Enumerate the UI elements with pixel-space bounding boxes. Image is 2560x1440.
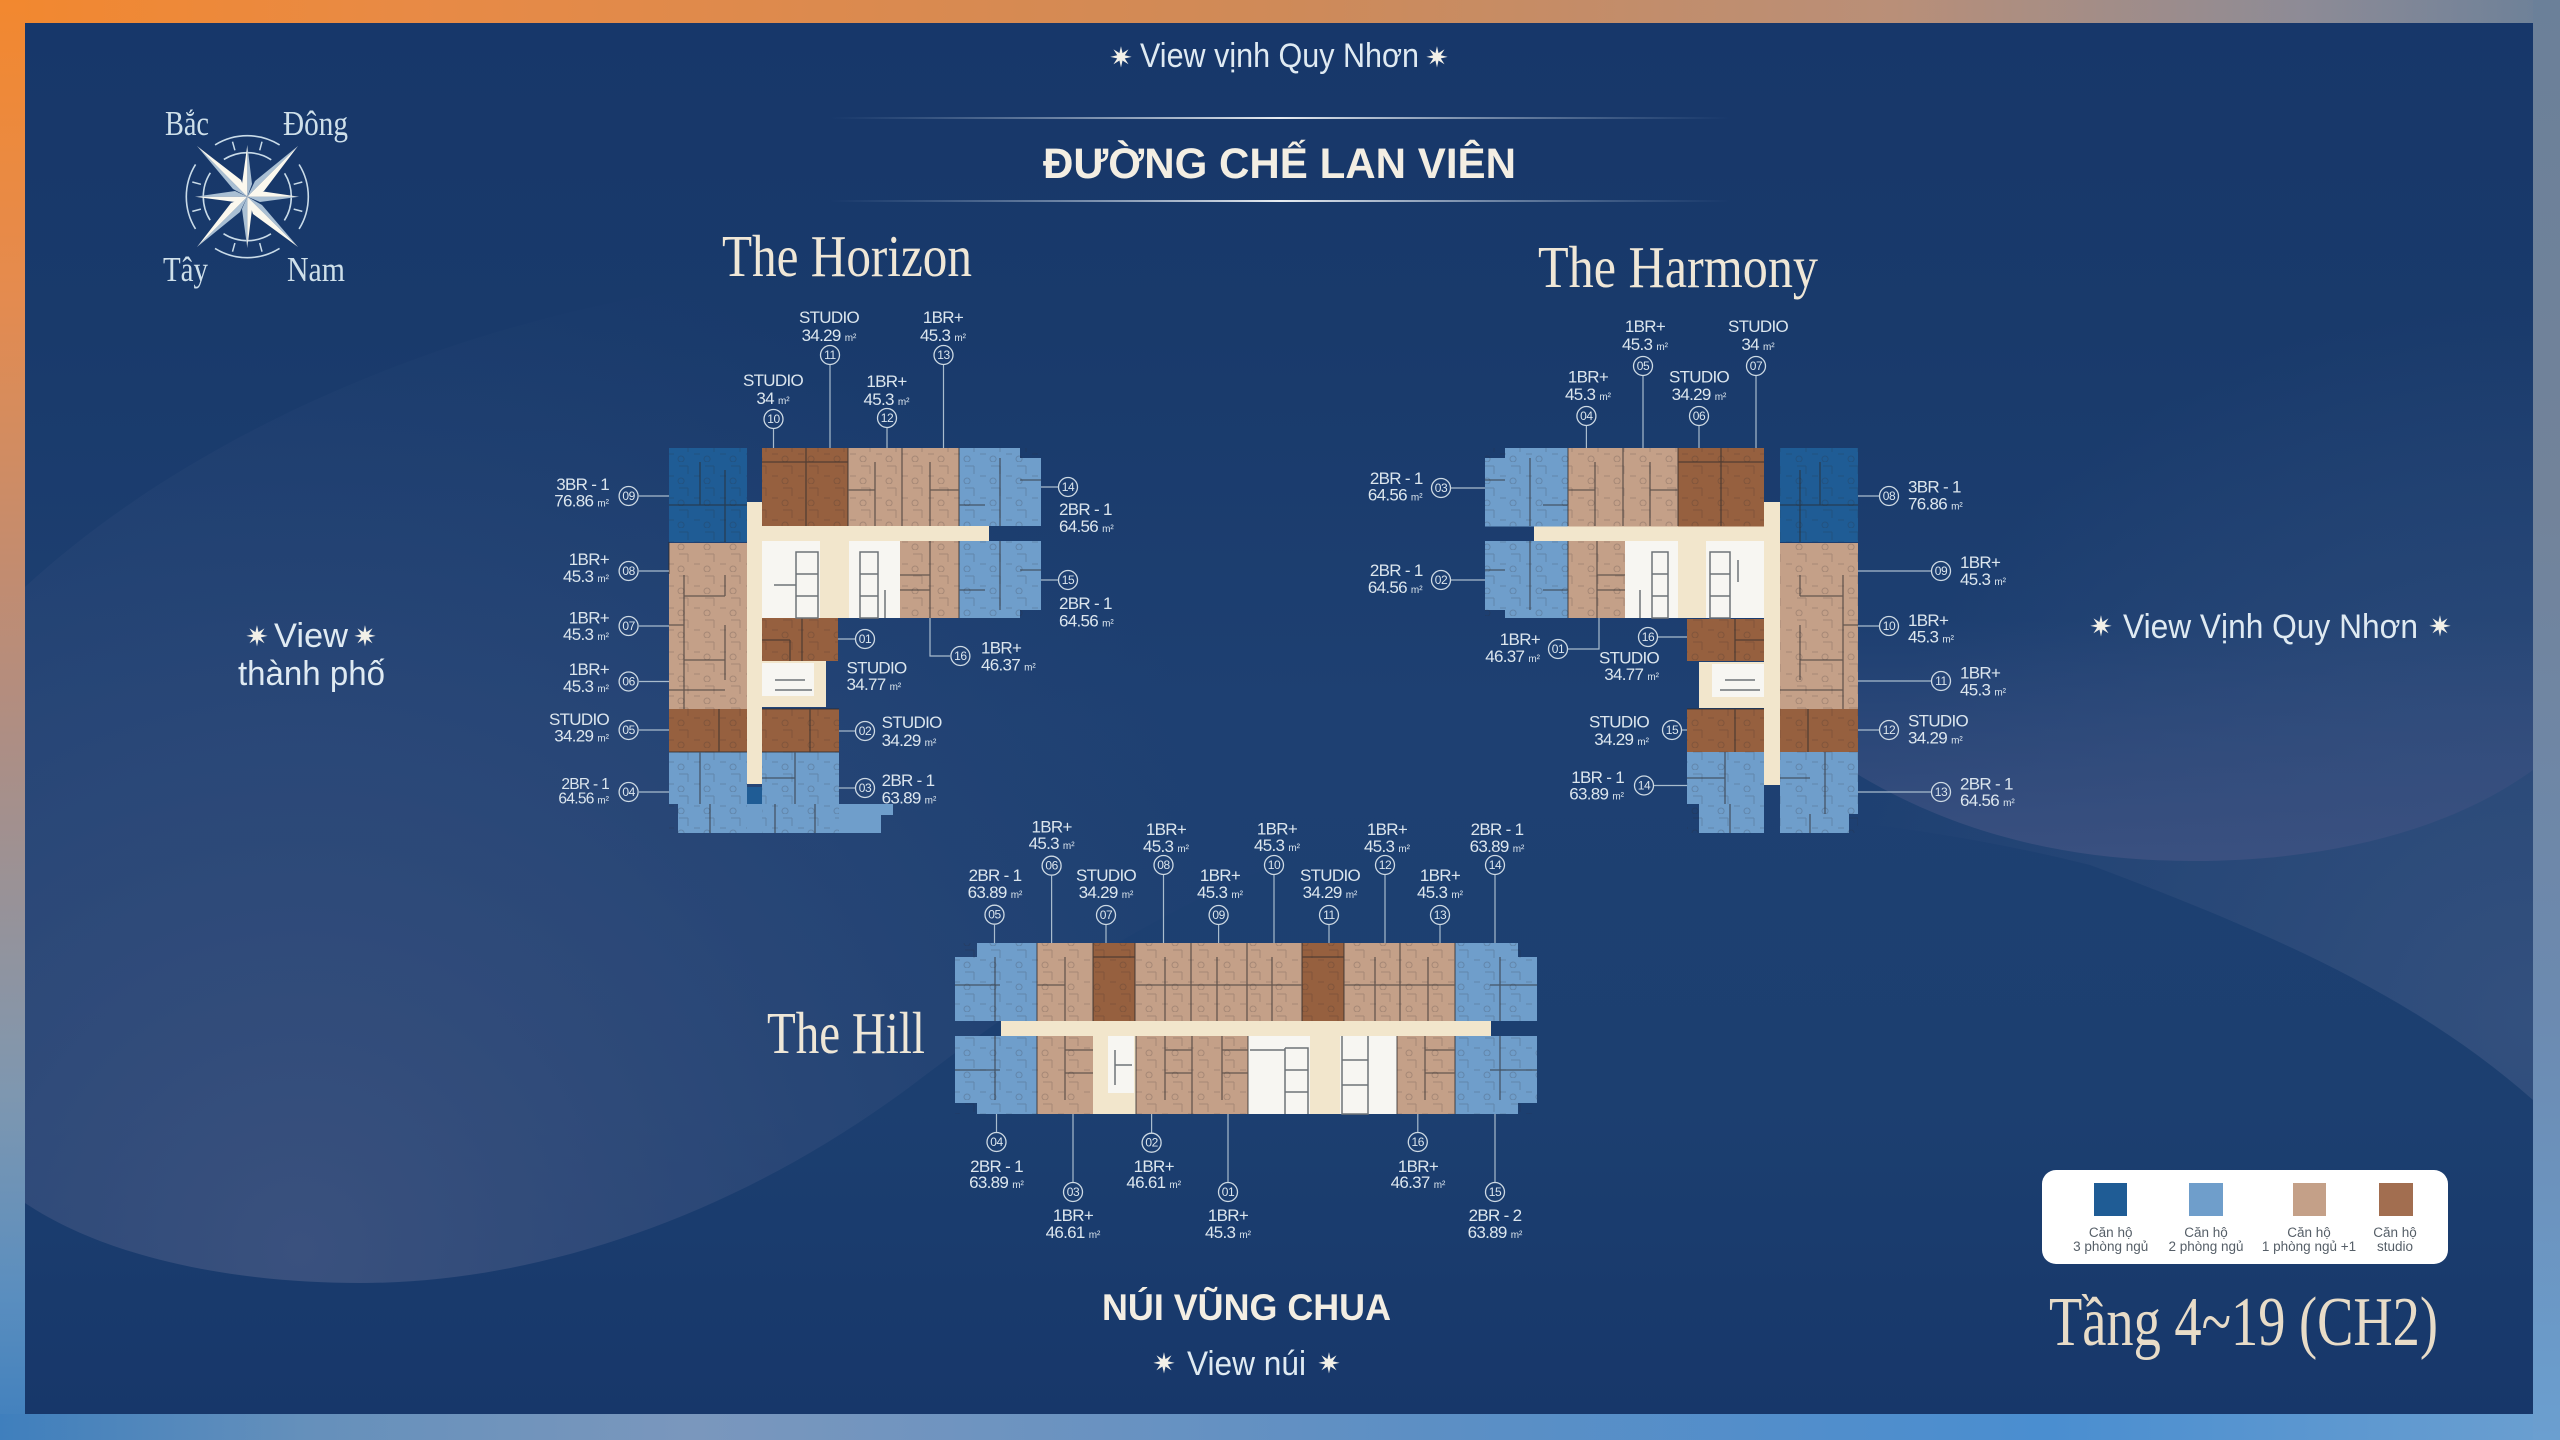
label 09 (554, 475, 669, 510)
label 13: 45.3 m² (920, 326, 967, 345)
label 07 (563, 609, 669, 644)
label 02: 34.29 m² (882, 731, 937, 750)
view city (238, 617, 385, 693)
label 10: 10 (767, 412, 780, 426)
label 03: 03 (1067, 1185, 1080, 1199)
label 12: 12 (881, 411, 894, 425)
label 02: 1BR+ (1134, 1157, 1175, 1176)
label 01 (838, 630, 907, 694)
label 04 (1565, 368, 1612, 448)
label 04: 63.89 m² (969, 1173, 1025, 1192)
label 08: 08 (622, 564, 636, 578)
label 11: 11 (824, 348, 837, 362)
label 15 (1589, 713, 1687, 749)
label 06 (1669, 368, 1729, 448)
label 10: 1BR+ (1908, 611, 1949, 630)
label 12: 12 (1379, 858, 1392, 872)
label 09: 1BR+ (1960, 553, 2001, 572)
legend: Căn hộ (2184, 1225, 2228, 1240)
label 15: 63.89 m² (1468, 1223, 1523, 1242)
label 05: 05 (622, 723, 636, 737)
label 09: 3BR - 1 (556, 475, 609, 494)
label 08 (563, 550, 669, 586)
label 03 (1046, 1114, 1101, 1242)
label 07: 07 (1750, 359, 1763, 373)
label 14: 14 (1062, 480, 1075, 494)
label 11: STUDIO (1300, 866, 1360, 885)
label 04 (969, 1114, 1025, 1192)
label 13 (920, 308, 967, 448)
label 13: 1BR+ (1420, 866, 1461, 885)
label 05: 63.89 m² (968, 883, 1023, 902)
view mountain: ✷ (1317, 1347, 1341, 1380)
label 05: 2BR - 1 (969, 866, 1022, 885)
view mountain (1152, 1345, 1341, 1383)
label 05: 05 (1637, 359, 1650, 373)
label 03: 2BR - 1 (1370, 469, 1423, 488)
legend: 3 phòng ngủ (2073, 1239, 2148, 1254)
label 04: 04 (622, 785, 636, 799)
view mountain: ✷ (1152, 1347, 1176, 1380)
label 12: 45.3 m² (1364, 837, 1411, 856)
floor range title: Tầng 4~19 (CH2) (2049, 1284, 2438, 1361)
label 04 (558, 776, 669, 808)
label 02: 02 (1145, 1136, 1159, 1150)
label 03 (1368, 469, 1485, 505)
view mountain: View núi (1187, 1345, 1306, 1383)
label 03: 1BR+ (1053, 1206, 1094, 1225)
compass rose: Nam (287, 250, 345, 289)
label 14: 64.56 m² (1059, 517, 1114, 536)
label 16: 16 (954, 649, 967, 663)
label 10: 10 (1883, 619, 1896, 633)
compass rose: Tây (163, 250, 208, 289)
label 07 (1728, 317, 1788, 448)
label 03: 46.61 m² (1046, 1223, 1101, 1242)
label 14: 2BR - 1 (1471, 820, 1524, 839)
label 02 (1126, 1114, 1182, 1192)
label 05 (549, 710, 669, 746)
tower heading: The Horizon: The Horizon (722, 223, 972, 289)
label 08: 1BR+ (1146, 820, 1187, 839)
label 06 (563, 660, 669, 696)
legend: Căn hộ (2089, 1225, 2132, 1240)
label 10: 45.3 m² (1254, 836, 1301, 855)
label 07: 1BR+ (569, 609, 610, 628)
label 09: 09 (1935, 564, 1948, 578)
label 04: 04 (1580, 409, 1593, 423)
label 08 (1143, 820, 1190, 943)
label 14 (1569, 768, 1687, 804)
label 07: STUDIO (1728, 317, 1788, 336)
label 16: 1BR+ (1398, 1157, 1439, 1176)
label 16 (1599, 628, 1687, 684)
label 08: 45.3 m² (1143, 837, 1190, 856)
label 13: 2BR - 1 (1960, 774, 2013, 794)
label 14: 14 (1489, 858, 1502, 872)
label 01: 34.77 m² (846, 675, 902, 694)
label 10: 45.3 m² (1908, 628, 1955, 646)
label 03: 63.89 m² (882, 789, 937, 808)
label 05: 05 (988, 908, 1001, 922)
heading: mountain name: NÚI VŨNG CHUA (1102, 1286, 1391, 1328)
label 14 (1041, 478, 1114, 536)
label 09 (1858, 553, 2007, 589)
label 14 (1470, 820, 1525, 943)
label 01 (1205, 1114, 1252, 1242)
label 10: 34 m² (756, 389, 790, 408)
view city: thành phố (238, 655, 385, 693)
label 12: STUDIO (1908, 712, 1968, 730)
label 12: 34.29 m² (1908, 729, 1963, 748)
label 12 (1364, 820, 1411, 943)
label 09: 76.86 m² (554, 492, 610, 510)
label 06: 34.29 m² (1672, 385, 1727, 404)
tower heading: The Harmony: The Harmony (1538, 234, 1818, 300)
label 03 (839, 771, 937, 808)
label 06: 1BR+ (569, 660, 610, 679)
label 01: 45.3 m² (1205, 1223, 1252, 1242)
label 11 (1300, 866, 1360, 943)
label 11 (1858, 664, 2007, 700)
label 05 (1622, 317, 1669, 448)
label 04: 45.3 m² (1565, 385, 1612, 404)
label 13: 13 (937, 348, 950, 362)
label 12: 45.3 m² (864, 390, 910, 409)
view city: ✷ (353, 620, 377, 653)
label 08: 45.3 m² (563, 567, 610, 586)
label 14: 63.89 m² (1569, 785, 1625, 804)
label 11: 34.29 m² (802, 326, 857, 345)
label 01: STUDIO (846, 658, 907, 678)
label 03: 64.56 m² (1368, 486, 1423, 505)
unit labels: The Horizon (549, 308, 1114, 808)
tower heading: The Hill: The Hill (767, 1000, 925, 1066)
label 08 (1858, 478, 1963, 514)
label 16 (1391, 1114, 1446, 1192)
label 01: 01 (859, 632, 872, 646)
label 12: 1BR+ (1367, 820, 1408, 839)
floor plan: The Harmony (1485, 448, 1858, 833)
label 04: 2BR - 1 (970, 1157, 1023, 1176)
label 16: 1BR+ (981, 638, 1022, 658)
label 12: 1BR+ (866, 372, 907, 391)
legend: studio (2377, 1239, 2413, 1254)
label 15 (1041, 570, 1114, 630)
label 15: 15 (1489, 1185, 1502, 1199)
decorative rule bottom (830, 200, 1730, 202)
view city: ✷ (245, 620, 269, 653)
label 06: STUDIO (1669, 368, 1729, 386)
label 02: 02 (859, 724, 872, 738)
label 06 (1029, 818, 1075, 943)
label 16: 16 (1412, 1135, 1425, 1149)
label 11: 34.29 m² (1303, 883, 1358, 902)
label 15: 15 (1666, 723, 1679, 737)
label 10: 10 (1268, 858, 1281, 872)
label 13 (1858, 774, 2015, 810)
decorative rule top (830, 117, 1730, 119)
label 15: 2BR - 1 (1059, 594, 1112, 613)
label 09: 09 (1212, 908, 1226, 922)
label 01: 01 (1552, 642, 1565, 656)
label 14: 14 (1638, 778, 1651, 792)
label 02: STUDIO (882, 713, 942, 732)
heading: view bay: ✷ (1425, 41, 1449, 74)
label 06: 06 (1693, 409, 1706, 423)
label 05 (968, 866, 1023, 943)
label 07: STUDIO (1076, 866, 1136, 885)
label 10 (1254, 820, 1301, 943)
label 15: 15 (1062, 573, 1075, 587)
label 14: 63.89 m² (1470, 837, 1525, 856)
label 03: 03 (1435, 481, 1448, 495)
label 16: 16 (1642, 630, 1655, 644)
compass rose (163, 104, 348, 289)
label 06: 45.3 m² (1029, 834, 1075, 853)
label 01: 01 (1222, 1185, 1235, 1199)
label 07: 45.3 m² (563, 625, 610, 644)
label 01 (1485, 618, 1599, 666)
label 02 (1368, 561, 1485, 597)
label 13: 1BR+ (923, 308, 964, 327)
label 06: 45.3 m² (563, 677, 610, 696)
label 01: 1BR+ (1208, 1206, 1249, 1225)
legend (2042, 1170, 2448, 1264)
label 09: 45.3 m² (1197, 883, 1244, 902)
label 08: 1BR+ (569, 550, 610, 569)
label 11: 11 (1935, 674, 1948, 688)
title: road name: ĐƯỜNG CHẾ LAN VIÊN (1043, 139, 1516, 188)
label 06: 06 (622, 674, 636, 688)
legend: Căn hộ (2287, 1225, 2331, 1240)
label 12 (864, 372, 910, 448)
label 04: 2BR - 1 (561, 776, 609, 793)
label 16: 34.77 m² (1604, 665, 1660, 684)
label 09: 45.3 m² (1960, 570, 2007, 589)
label 05: 45.3 m² (1622, 335, 1669, 354)
label 11: 45.3 m² (1960, 681, 2007, 700)
label 16: 46.37 m² (1391, 1173, 1446, 1192)
label 05: 1BR+ (1625, 317, 1666, 336)
label 07: 34 m² (1741, 335, 1775, 354)
label 14: 1BR - 1 (1571, 768, 1624, 787)
label 11: 1BR+ (1960, 664, 2001, 682)
label 06: 1BR+ (1031, 818, 1072, 837)
label 05: STUDIO (549, 710, 609, 729)
label 07: 34.29 m² (1079, 883, 1134, 902)
label 16: STUDIO (1599, 649, 1659, 668)
heading: view bay: View vịnh Quy Nhơn (1140, 37, 1419, 75)
floor plan: The Hill (955, 943, 1537, 1114)
legend: 2 phòng ngủ (2168, 1239, 2244, 1254)
label 02: 46.61 m² (1126, 1173, 1182, 1192)
legend: 1 phòng ngủ +1 (2262, 1239, 2356, 1254)
label 08: 3BR - 1 (1908, 478, 1961, 497)
label 11: STUDIO (799, 308, 859, 327)
label 13: 64.56 m² (1960, 791, 2015, 810)
label 07 (1076, 866, 1136, 943)
label 12 (1858, 712, 1968, 748)
label 01: 46.37 m² (1485, 647, 1541, 666)
label 08: 08 (1157, 858, 1170, 872)
label 06: 06 (1045, 859, 1059, 873)
label 04: 64.56 m² (558, 791, 610, 808)
view bay right: View Vịnh Quy Nhơn (2123, 608, 2418, 646)
label 15: 2BR - 2 (1469, 1206, 1522, 1225)
unit labels: The Harmony (1368, 317, 2015, 810)
label 02: 64.56 m² (1368, 578, 1423, 597)
label 09 (1197, 866, 1244, 943)
label 07: 07 (622, 619, 636, 633)
label 15: 64.56 m² (1059, 612, 1114, 630)
label 16 (930, 618, 1036, 674)
label 01: 1BR+ (1500, 630, 1541, 649)
label 15: 34.29 m² (1594, 730, 1650, 749)
label 07: 07 (1100, 908, 1113, 922)
label 11: 11 (1323, 908, 1336, 922)
label 16: 46.37 m² (981, 656, 1036, 674)
label 09: 1BR+ (1200, 866, 1241, 885)
label 13: 13 (1434, 908, 1447, 922)
label 11 (799, 308, 859, 448)
legend: Căn hộ (2373, 1225, 2417, 1240)
label 10: STUDIO (743, 371, 803, 390)
label 04: 04 (990, 1135, 1003, 1149)
label 02 (839, 713, 942, 750)
label 08: 08 (1883, 489, 1896, 503)
label 09: 09 (622, 489, 636, 503)
label 13 (1417, 866, 1464, 943)
floor plan: The Horizon (669, 448, 1041, 833)
label 02: 02 (1435, 573, 1448, 587)
label 05: 34.29 m² (554, 726, 610, 746)
label 03: 03 (859, 781, 872, 795)
compass rose: Bắc (165, 104, 209, 143)
label 02: 2BR - 1 (1370, 561, 1423, 580)
view city: View (274, 617, 348, 655)
label 03: 2BR - 1 (882, 771, 935, 790)
label 13: 45.3 m² (1417, 883, 1464, 902)
label 13: 13 (1935, 785, 1948, 799)
label 15: STUDIO (1589, 713, 1649, 732)
label 10 (1858, 611, 1955, 646)
view bay right: ✷ (2428, 610, 2452, 643)
view bay right: ✷ (2089, 610, 2113, 643)
label 15 (1468, 1114, 1523, 1242)
label 10 (743, 371, 803, 448)
label 10: 1BR+ (1257, 820, 1298, 839)
label 04: 1BR+ (1568, 368, 1609, 386)
unit labels: The Hill (968, 818, 1525, 1242)
heading: view bay: ✷ (1109, 41, 1133, 74)
label 08: 76.86 m² (1908, 494, 1963, 514)
label 14: 2BR - 1 (1059, 500, 1112, 519)
label 12: 12 (1883, 723, 1896, 737)
compass rose: Đông (283, 104, 348, 143)
